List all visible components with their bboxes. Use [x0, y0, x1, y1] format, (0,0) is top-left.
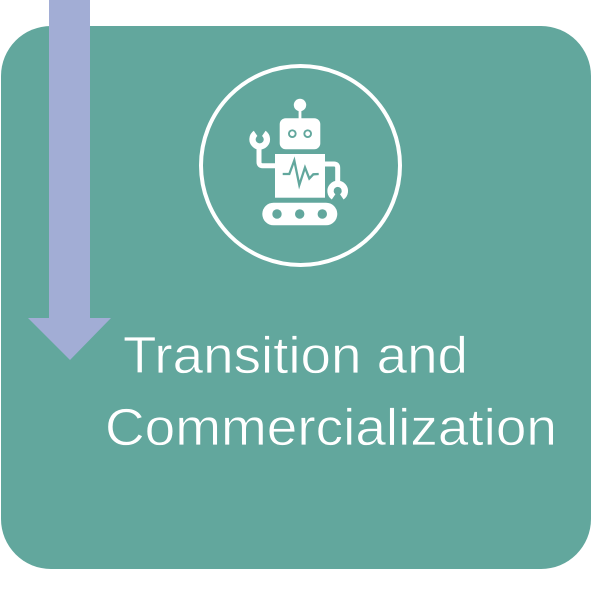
arrow: downward lavender arrow	[28, 0, 111, 360]
icon: robot in circle	[201, 66, 400, 265]
robot left arm with wrench	[253, 133, 276, 166]
robot track	[262, 203, 337, 225]
robot head	[280, 118, 320, 149]
heading line 2: Commercialization	[105, 399, 557, 457]
heading line 1: Transition and	[123, 327, 468, 385]
heading: Transition and Commercialization	[105, 327, 557, 457]
icon ring	[201, 66, 400, 265]
robot antenna	[294, 99, 306, 120]
robot right arm with claw	[324, 164, 345, 197]
robot body with pulse	[275, 154, 325, 198]
